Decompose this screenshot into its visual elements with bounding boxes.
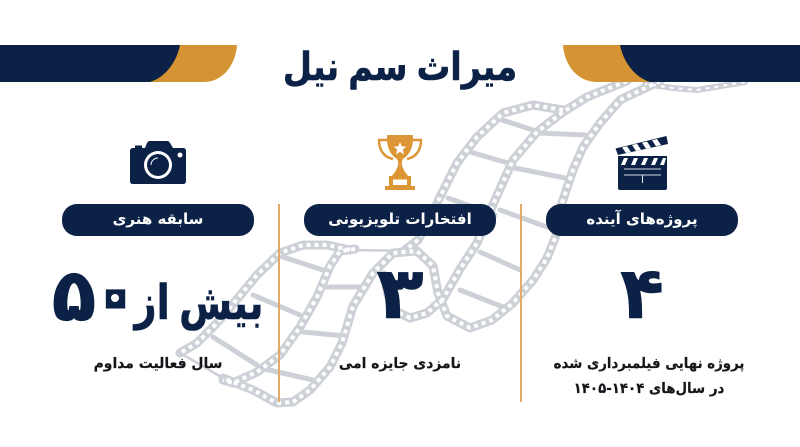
pill heading: television honours: افتخارات تلویزیونی	[328, 210, 472, 228]
pill heading: upcoming projects	[546, 204, 738, 236]
caption: Emmy nominations: نامزدی جایزه امی	[339, 356, 461, 372]
pill heading: past career: سابقه هنری	[113, 210, 203, 228]
big number: more than 50: بیش از	[134, 275, 264, 331]
icon: trophy	[378, 135, 422, 190]
caption: final projects filmed: پروژه نهایی فیلمبرداری شده	[554, 356, 744, 372]
icon: camera	[130, 141, 186, 184]
pill heading: upcoming projects: پروژه‌های آینده	[586, 210, 698, 228]
column divider	[278, 204, 280, 402]
title: میراث سم نیل	[283, 45, 517, 90]
big number: more than 50	[52, 234, 264, 351]
column divider	[520, 204, 522, 402]
pill heading: past career	[62, 204, 254, 236]
pill heading: television honours	[304, 204, 496, 236]
caption: final projects filmed	[554, 356, 744, 397]
icon: clapperboard	[616, 136, 668, 190]
big number: 4: ۴	[620, 251, 664, 335]
left header band	[0, 45, 237, 82]
right header band	[563, 45, 800, 82]
big number: 3: ۳	[376, 251, 424, 335]
caption: final projects filmed: در سال‌های ۱۴۰۴-۱۴۰۵	[574, 381, 724, 397]
caption: years of activity: سال فعالیت مداوم	[94, 356, 222, 372]
big number: more than 50: ۰	[85, 234, 146, 351]
big number: more than 50: ۵	[52, 253, 96, 337]
